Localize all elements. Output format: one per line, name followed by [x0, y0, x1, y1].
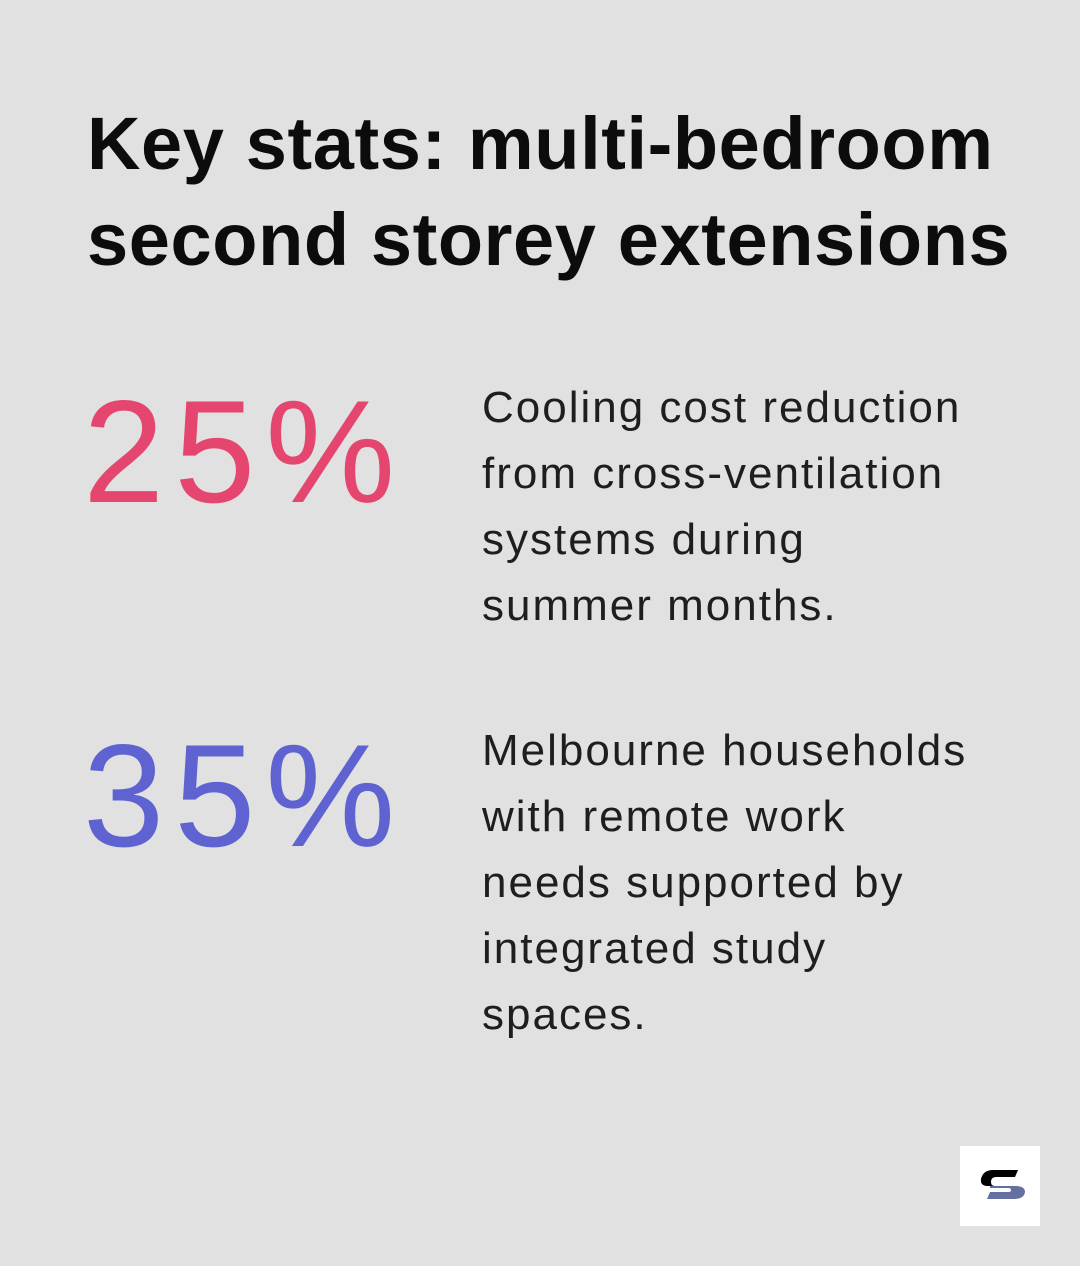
stat 2 description: Melbourne households [482, 726, 967, 775]
stat 1 description: systems during [482, 515, 806, 564]
title: second storey extensions [87, 198, 1010, 281]
stat 2 description: with remote work [482, 792, 847, 841]
title: Key stats: multi-bedroom [87, 102, 994, 185]
stat 1 number: 25% [83, 370, 405, 533]
stat 1 description [482, 383, 961, 630]
stat 2 description: needs supported by [482, 858, 905, 907]
stat 2 description: integrated study [482, 924, 827, 973]
stat 1 description: summer months. [482, 581, 838, 630]
stat 2 number: 35% [83, 714, 405, 877]
stat 1 description: from cross-ventilation [482, 449, 944, 498]
stat 1 description: Cooling cost reduction [482, 383, 961, 432]
title [87, 102, 1010, 281]
logo [960, 1146, 1040, 1226]
stat 2 description: spaces. [482, 990, 648, 1039]
stat 2 description [482, 726, 967, 1039]
